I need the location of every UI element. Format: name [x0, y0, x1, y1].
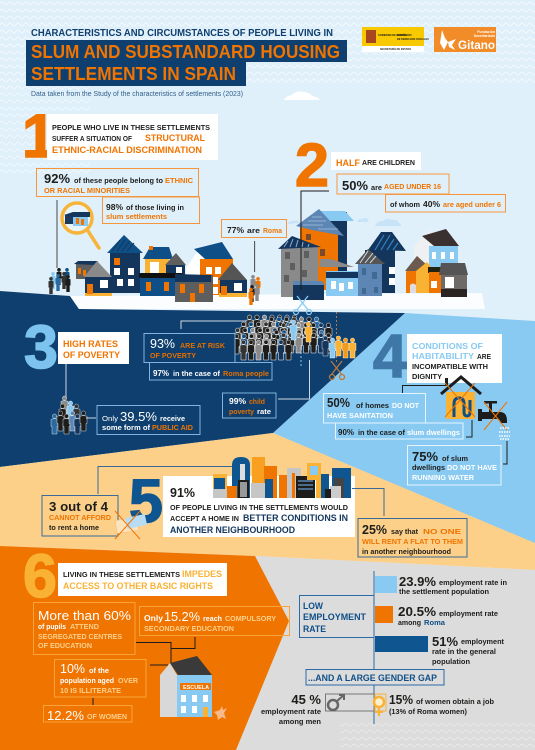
callout 99%: 99%	[229, 397, 246, 406]
icon: large crowd	[233, 315, 356, 360]
label 23.9%: employment rate in	[439, 578, 507, 587]
logo: government of Spain: DE DERECHOS SOCIALES	[397, 38, 429, 41]
logo: government of Spain: SECRETARÍA DE ESTADO	[380, 48, 411, 51]
callout 50%: 50%	[327, 395, 350, 410]
logo: Fundacion Secretariado Gitano: Fundación	[477, 30, 495, 34]
number 6: 6	[23, 542, 57, 610]
icon: small crowd	[51, 396, 87, 434]
label 15%: of women obtain a job	[416, 697, 494, 706]
callout 92%: ETHNIC	[165, 176, 194, 185]
label 23.9%	[399, 574, 507, 596]
statement text: ACCEPT A HOME IN	[170, 514, 239, 523]
heading box: ACCESS TO OTHER BASIC RIGHTS	[63, 581, 213, 591]
statement text	[170, 485, 349, 535]
label 45%	[261, 692, 321, 726]
callout 40%	[386, 194, 506, 212]
section 2	[278, 131, 506, 314]
callout 97%: 97%	[153, 369, 169, 378]
callout 40%: of whom	[390, 200, 420, 209]
logo: government of Spain: GOBIERNO DE ESPAÑA	[378, 34, 407, 37]
background panel: peach	[0, 433, 535, 570]
label 20.5%: among	[398, 618, 421, 627]
callout 10%: 10%	[60, 661, 85, 676]
callout 93%: ARE AT RISK	[180, 341, 226, 350]
callout 90%: 90%	[338, 428, 354, 437]
heading box	[58, 332, 129, 364]
callout 25%: in another neighbourhood	[362, 547, 451, 556]
connector	[503, 441, 507, 464]
label 45%: among men	[279, 717, 321, 726]
callout 15.2%: reach	[203, 614, 222, 623]
callout 99%: child	[249, 397, 265, 406]
label 15%	[389, 692, 494, 716]
callout 92%: of these people belong to	[74, 176, 163, 185]
background panel: dark blue	[0, 291, 405, 467]
statement text: ANOTHER NEIGHBOURHOOD	[170, 525, 295, 535]
callout 90%: slum dwellings	[407, 428, 460, 437]
icon: city skyline	[213, 457, 351, 498]
callout 15.2%: COMPULSORY	[225, 614, 276, 623]
callout 39.5%: some form of	[102, 423, 150, 432]
title box: SETTLEMENTS IN SPAIN	[31, 63, 236, 84]
label 45%: 45 %	[291, 692, 321, 707]
callout 92%	[36, 168, 198, 196]
callout 75%: 75%	[412, 449, 438, 464]
callout 50%: 50%	[342, 178, 368, 193]
callout 39.5%: 39.5%	[120, 409, 157, 424]
heading box: OF POVERTY	[63, 350, 120, 360]
callout 3 out of 4	[42, 496, 118, 536]
bar: settlement population	[375, 576, 397, 593]
icon: scissors light blue	[294, 296, 312, 314]
connectors	[93, 637, 195, 705]
subtitle: Data taken from the Study of the characteristics of settlements (2023)	[31, 89, 243, 98]
label 23.9%: the settlement population	[399, 587, 489, 596]
callout 97%: in the case of	[173, 369, 220, 378]
heading box: INCOMPATIBLE WITH	[412, 362, 488, 371]
background wave pattern	[0, 0, 535, 85]
callout 98%: 98%	[106, 202, 123, 212]
number 1: 1	[22, 102, 56, 170]
label 51%: rate in the general	[432, 647, 496, 656]
callout 25%	[358, 518, 467, 557]
statement text: BETTER CONDITIONS IN	[243, 513, 348, 523]
houses group right	[278, 209, 468, 300]
icon: scissors orange	[330, 361, 344, 380]
callout 50%: are	[371, 183, 382, 192]
callout 10%	[54, 660, 146, 697]
bar with male symbol	[326, 694, 374, 711]
axis line	[373, 571, 375, 724]
label 15%: 15%	[389, 692, 413, 707]
callout 10%: population aged	[60, 676, 114, 685]
logo: Fundacion Secretariado Gitano: Gitano	[458, 38, 495, 52]
callout 60%: ATTEND	[70, 622, 100, 631]
callout 60%: OF EDUCATION	[38, 641, 92, 650]
logo: government of Spain: MINISTERIO	[397, 34, 412, 37]
section 6	[23, 542, 290, 723]
callout 25%: WILL RENT A FLAT TO THEM	[362, 537, 463, 546]
callout 50%	[324, 394, 426, 423]
callout 40%: 40%	[423, 199, 440, 209]
callout 97%	[150, 362, 272, 380]
label 20.5%: employment rate	[439, 609, 498, 618]
callout 10%: OVER	[118, 676, 139, 685]
callout 75%: RUNNING WATER	[412, 473, 475, 482]
callout 77%: Roma	[263, 226, 283, 235]
white ground	[70, 293, 485, 309]
callout 99%: poverty	[229, 407, 255, 416]
heading box: HALF	[336, 158, 360, 169]
heading box: PEOPLE WHO LIVE IN THESE SETTLEMENTS	[52, 123, 210, 132]
callout 25%: say that	[391, 527, 418, 536]
callout 12.2%: 12.2%	[47, 708, 84, 723]
callout 98%: slum settlements	[106, 212, 167, 221]
callout 75%: DO NOT HAVE	[447, 463, 497, 472]
heading box: DIGNITY	[412, 372, 442, 381]
heading: gender gap	[306, 670, 444, 685]
number 4: 4	[373, 322, 407, 390]
label 51%: population	[432, 657, 470, 666]
callout 39.5%: Only	[102, 414, 118, 423]
callout 15.2%: 15.2%	[164, 609, 200, 624]
bar: general population	[375, 636, 428, 652]
callout 92%: 92%	[44, 171, 70, 186]
callout 92%: OR RACIAL MINORITIES	[44, 186, 130, 195]
background panel: orange	[0, 546, 289, 750]
callout 99%: rate	[257, 407, 271, 416]
icon: tap crossed	[478, 401, 510, 439]
callout 75%: of slum	[442, 454, 468, 463]
label 51%: 51%	[432, 634, 458, 649]
callout 77%	[222, 220, 286, 238]
connector	[402, 386, 445, 393]
callout 39.5%: PUBLIC AID	[152, 423, 194, 432]
connector	[301, 191, 329, 290]
callout 50%: of homes	[356, 401, 389, 410]
callout 12.2%	[44, 706, 132, 723]
heading box: HABITABILITY	[412, 351, 474, 361]
callout 15.2%: SECONDARY EDUCATION	[144, 624, 234, 633]
callout 3 out of 4: 3 out of 4	[49, 499, 109, 514]
background wave pattern bottom right	[340, 722, 535, 750]
callout 39.5%: receive	[160, 414, 185, 423]
connector	[86, 417, 96, 419]
callout 39.5%	[97, 406, 200, 434]
callout 75%	[408, 446, 501, 485]
number 3: 3	[24, 313, 58, 381]
callout 75%: dwellings	[412, 463, 445, 472]
callout 3 out of 4: CANNOT AFFORD	[49, 513, 112, 522]
callout 60%: of pupils	[38, 622, 66, 631]
callout 90%	[336, 423, 463, 439]
background wave pattern left	[0, 85, 90, 175]
connector	[352, 488, 384, 516]
heading: low employment rate: RATE	[303, 624, 326, 634]
callout 60%: More than 60%	[38, 608, 131, 623]
heading box	[58, 563, 227, 596]
connector	[65, 364, 67, 398]
logo: government of Spain	[362, 27, 429, 52]
callout 93%: 93%	[150, 336, 175, 351]
connector	[466, 420, 472, 437]
callout 40%: are aged under 6	[443, 200, 501, 209]
section 5	[42, 457, 467, 557]
heading box	[331, 152, 421, 170]
callout 98%: of those living in	[126, 203, 184, 212]
callout 60%: SEGREGATED CENTRES	[38, 632, 122, 641]
label 15%: (13% of Roma women)	[389, 707, 467, 716]
callout 90%: in the case of	[358, 428, 405, 437]
callout 50%: HAVE SANITATION	[327, 411, 393, 420]
callout 77%: 77%	[227, 225, 244, 235]
background panel: light blue	[273, 313, 535, 545]
icon: banknotes crossed	[115, 511, 147, 539]
label 20.5%	[398, 604, 498, 627]
title box	[26, 40, 347, 86]
icon: foundation logo	[214, 706, 227, 720]
heading: low employment rate: LOW	[303, 601, 323, 611]
callout 15.2%	[140, 606, 290, 636]
connector	[278, 360, 310, 399]
heading box: LIVING IN THESE SETTLEMENTS	[63, 570, 180, 579]
heading box	[47, 114, 218, 160]
background panel: grey	[236, 556, 535, 750]
label 20.5%: Roma	[424, 618, 446, 627]
logo: Fundacion Secretariado Gitano: Secretariado	[474, 34, 495, 38]
label 45%: employment rate	[261, 707, 321, 716]
icon: school building	[160, 656, 212, 717]
number 5: 5	[129, 467, 163, 535]
heading box: STRUCTURAL	[145, 133, 205, 143]
small clouds	[287, 218, 401, 226]
number 2: 2	[295, 131, 329, 199]
heading: low employment rate: EMPLOYMENT	[303, 612, 366, 622]
employment section	[261, 571, 507, 726]
heading: low employment rate	[300, 596, 374, 638]
female symbol	[374, 694, 386, 716]
connector	[181, 321, 250, 329]
heading box: ETHNIC-RACIAL DISCRIMINATION	[52, 145, 202, 155]
heading: gender gap: ...AND A LARGE GENDER GAP	[308, 673, 437, 683]
callout 25%: 25%	[362, 522, 387, 537]
callout 12.2%: OF WOMEN	[87, 712, 127, 721]
cloud	[284, 91, 320, 100]
callout 10%: of the	[89, 666, 109, 675]
label 20.5%: 20.5%	[398, 604, 436, 619]
connector dashed	[336, 312, 338, 364]
section 3	[24, 312, 356, 434]
statement text: 91%	[170, 485, 195, 500]
callout 10%: 10 IS ILLITERATE	[60, 686, 121, 695]
heading line: CHARACTERISTICS AND CIRCUMSTANCES OF PEOPLE LIVING IN	[31, 27, 333, 39]
callout 60%	[34, 602, 135, 654]
section 4	[324, 322, 510, 485]
icon: house with logo crossed	[441, 377, 481, 419]
houses group left	[74, 235, 247, 302]
callout 15.2%: Only	[144, 614, 164, 623]
heading box: ARE	[477, 352, 491, 361]
label 51%	[432, 634, 504, 666]
callout 50%	[337, 174, 449, 194]
callout 25%: NO ONE	[423, 527, 461, 536]
callout 3 out of 4: to rent a home	[49, 523, 99, 532]
logo: Fundacion Secretariado Gitano	[434, 27, 496, 52]
callout 93%	[144, 334, 235, 362]
callout 77%: are	[247, 226, 260, 235]
connector	[254, 241, 256, 272]
callout 50%: DO NOT	[392, 401, 419, 410]
callout 99%	[222, 393, 276, 418]
icon: school building: ESCUELA	[183, 685, 209, 691]
icon: people group	[48, 268, 70, 294]
statement text: OF PEOPLE LIVING IN THE SETTLEMENTS WOULD	[170, 503, 349, 512]
label 23.9%: 23.9%	[399, 574, 436, 589]
heading box: ARE CHILDREN	[362, 158, 415, 167]
bar: Roma	[375, 606, 393, 623]
heading box	[407, 334, 502, 383]
icon: people group right	[248, 275, 260, 305]
connector dashed	[300, 316, 302, 367]
callout 93%: OF POVERTY	[150, 351, 196, 360]
heading box: CONDITIONS OF	[412, 341, 483, 351]
callout 50%: AGED UNDER 16	[384, 182, 441, 191]
icon: magnifying glass	[62, 203, 99, 248]
white panel	[163, 476, 355, 537]
callout 97%: Roma people	[223, 369, 269, 378]
heading box: HIGH RATES	[63, 339, 118, 349]
title box: SLUM AND SUBSTANDARD HOUSING	[31, 41, 340, 62]
heading box: SUFFER A SITUATION OF	[52, 134, 132, 143]
callout 98%	[102, 197, 200, 224]
header	[26, 27, 347, 98]
section 1	[22, 102, 286, 305]
heading box: IMPEDES	[182, 569, 222, 579]
connector	[98, 466, 232, 494]
connector	[56, 200, 58, 268]
label 51%: employment	[461, 637, 504, 646]
